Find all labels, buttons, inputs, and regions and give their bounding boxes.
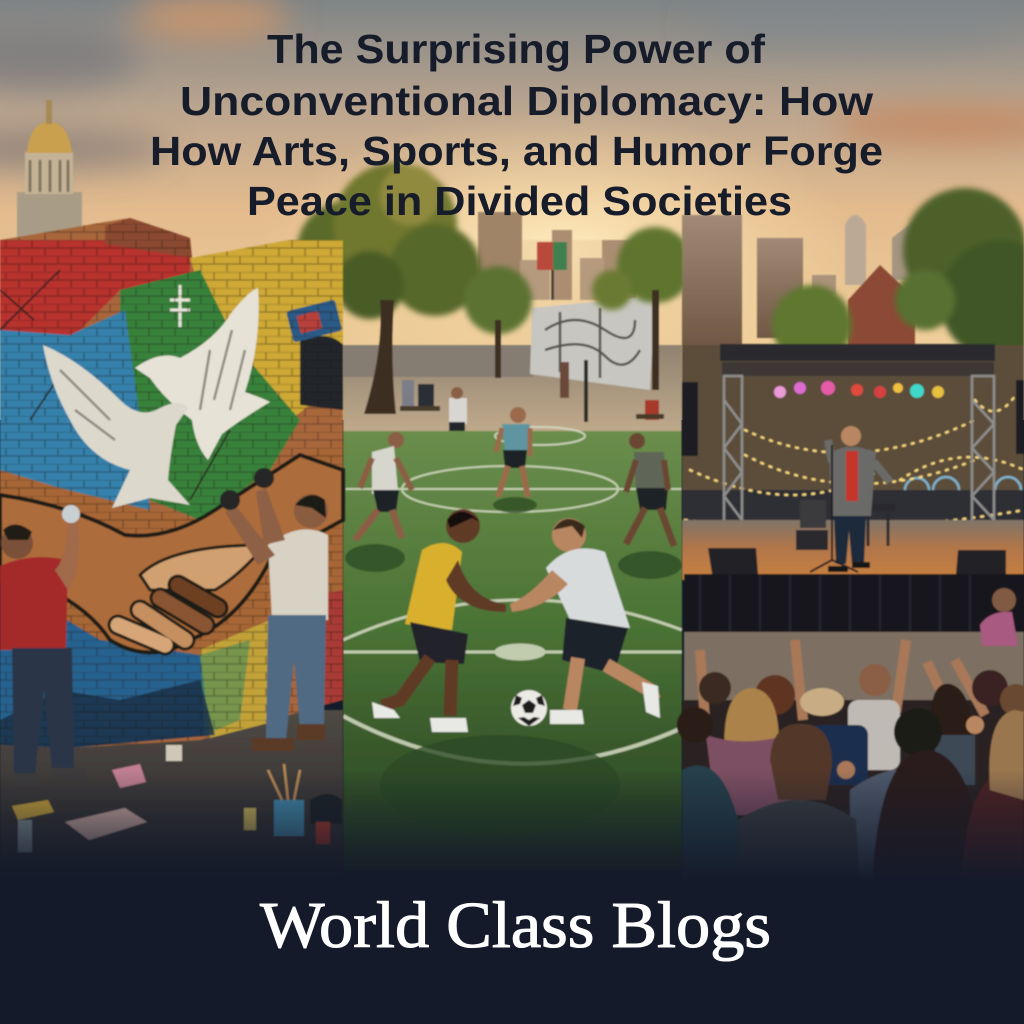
ground with art supplies bbox=[0, 710, 343, 880]
brick wall base bbox=[0, 218, 343, 748]
dark hair right bbox=[930, 684, 973, 760]
distant blue arch lights bbox=[905, 477, 1021, 490]
trees bbox=[297, 163, 693, 414]
hat person bbox=[800, 688, 844, 716]
capitol dome building bbox=[17, 100, 82, 252]
city and trees bbox=[682, 188, 1024, 535]
audience crowd bbox=[677, 640, 1024, 880]
player: background teal shirt bbox=[496, 407, 530, 497]
background bystanders bbox=[400, 360, 664, 454]
player: white polo bbox=[510, 518, 660, 724]
back row bbox=[699, 672, 731, 704]
seated spectator bbox=[980, 588, 1018, 646]
plaza bbox=[343, 345, 682, 435]
title bbox=[150, 26, 883, 224]
city backdrop bbox=[343, 212, 683, 380]
title: How Arts, Sports, and Humor Forge bbox=[150, 128, 883, 174]
player shadows bbox=[345, 497, 682, 835]
title: Unconventional Diplomacy: How bbox=[180, 78, 873, 124]
player: yellow shirt bbox=[372, 509, 506, 732]
woman blonde bbox=[724, 688, 779, 765]
stage speakers and furniture bbox=[708, 500, 1006, 574]
raised arms bbox=[700, 640, 985, 720]
person: comedian bbox=[810, 426, 890, 572]
panel: sports soccer field bbox=[297, 163, 693, 871]
string lights bbox=[685, 380, 1024, 528]
plaza floor bbox=[684, 632, 1024, 712]
graffiti wall segment bbox=[343, 242, 655, 390]
title: Peace in Divided Societies bbox=[247, 178, 792, 224]
field markings bbox=[343, 427, 682, 764]
player: background grey shirt bbox=[626, 433, 674, 546]
background sky bbox=[0, 0, 1024, 420]
panel: humor comedy stage bbox=[677, 188, 1024, 880]
bottom dark fade bbox=[0, 770, 1024, 882]
mural colours bbox=[0, 218, 343, 748]
stage floor and skirt bbox=[682, 520, 1024, 634]
stage truss and roof bbox=[682, 344, 1024, 548]
icon: white doves bbox=[43, 288, 270, 508]
person: right painter bbox=[220, 468, 328, 751]
panel: arts mural wall bbox=[0, 100, 343, 880]
soccer grass bbox=[343, 431, 682, 871]
brick texture bbox=[0, 218, 343, 748]
icon: soccer ball bbox=[511, 690, 547, 726]
brand name: World Class Blogs bbox=[260, 889, 771, 962]
stage lights bbox=[774, 381, 944, 398]
front row bbox=[894, 708, 942, 756]
title: The Surprising Power of bbox=[267, 26, 765, 72]
person: left painter bbox=[0, 505, 88, 785]
footer band bbox=[0, 880, 1024, 1024]
player: background white shirt bbox=[355, 432, 412, 540]
icon: handshake mural bbox=[0, 455, 343, 652]
